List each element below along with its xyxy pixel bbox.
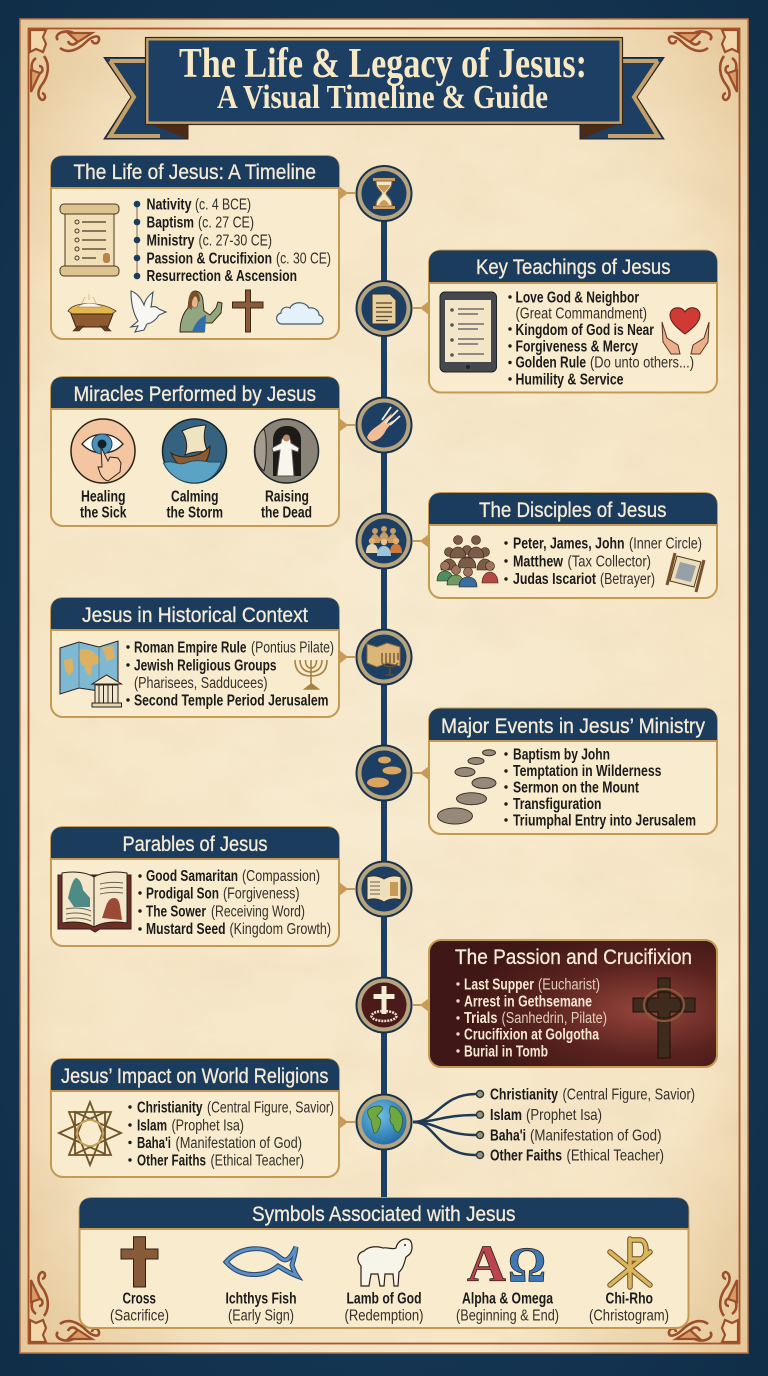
bullets: [504, 541, 508, 581]
icon: dove: [131, 291, 166, 332]
heading: Miracles Performed by Jesus: [74, 382, 316, 406]
icon: healing eye: [71, 419, 135, 483]
bullets: [456, 982, 460, 1053]
heading: The Passion and Crucifixion: [455, 945, 692, 969]
symbol labels: Lamb of God: [346, 1290, 422, 1308]
panel: disciples: [429, 493, 717, 598]
teachings list: Forgiveness & Mercy: [516, 338, 638, 356]
symbol labels: (Redemption): [344, 1308, 424, 1324]
passion list: (Sanhedrin, Pilate): [502, 1010, 607, 1027]
node: hourglass: [356, 165, 412, 222]
passion list: Trials: [464, 1010, 498, 1027]
panel: passion and crucifixion: [429, 940, 717, 1067]
bullets: [504, 752, 508, 822]
icon: storm boat: [162, 419, 226, 483]
disciples list: (Betrayer): [600, 571, 655, 588]
religions list: (Prophet Isa): [172, 1118, 244, 1134]
title line 1: The Life & Legacy of Jesus:: [179, 41, 587, 87]
parables list: (Receiving Word): [211, 904, 305, 920]
icon: heart and hands: [662, 308, 709, 354]
miracle labels: the Dead: [261, 504, 312, 522]
timeline list: Baptism: [146, 214, 194, 232]
icon: manger: [68, 294, 116, 331]
passion list: Arrest in Gethsemane: [464, 994, 592, 1010]
icon: torah scroll: [667, 553, 704, 592]
context list: Second Temple Period Jerusalem: [134, 692, 328, 710]
icon: cross: [121, 1237, 158, 1287]
bullets: [128, 1105, 132, 1162]
title line 2: A Visual Timeline & Guide: [217, 79, 548, 116]
timeline list: Nativity: [146, 196, 192, 214]
panel: world religions: [51, 1059, 339, 1177]
heading: The Life of Jesus: A Timeline: [74, 160, 316, 184]
timeline list: (c. 27-30 CE): [198, 232, 272, 250]
teachings list: Kingdom of God is Near: [516, 322, 654, 339]
miracle labels: Raising: [265, 488, 309, 506]
timeline list: [146, 196, 331, 285]
context list: Jewish Religious Groups: [134, 658, 276, 674]
events list: Temptation in Wilderness: [513, 763, 662, 780]
teachings list: Love God & Neighbor: [516, 290, 639, 306]
icon: lamb: [358, 1239, 412, 1286]
heading: Symbols Associated with Jesus: [252, 1202, 516, 1226]
panel: historical context: [51, 598, 339, 717]
timeline dots: [134, 201, 140, 279]
symbol labels: Chi-Rho: [606, 1290, 653, 1308]
icon: cloud: [277, 303, 323, 324]
events list: [513, 746, 696, 830]
icon: temple: [92, 675, 122, 707]
parables list: (Kingdom Growth): [230, 921, 331, 938]
icon: stepping stones: [438, 750, 496, 824]
timeline list: (c. 30 CE): [276, 250, 331, 268]
miracle labels: [80, 488, 312, 522]
icon: alpha and omega: [467, 1236, 546, 1293]
parables list: [146, 868, 331, 938]
node: map and menorah: [356, 628, 412, 686]
bullets: [508, 295, 512, 381]
religions list: Christianity: [137, 1100, 203, 1116]
heading: Jesus’ Impact on World Religions: [61, 1064, 328, 1088]
events list: Baptism by John: [513, 746, 610, 764]
teachings list: (Great Commandment): [516, 306, 647, 322]
disciples list: Peter, James, John: [513, 536, 624, 552]
icon: alpha and omega: Ω: [508, 1236, 546, 1292]
heading: The Disciples of Jesus: [479, 498, 666, 522]
faiths list: (Central Figure, Savior): [562, 1086, 695, 1104]
panel: symbols: [80, 1198, 688, 1328]
node: disciples group: [356, 512, 412, 570]
parables list: (Forgiveness): [223, 886, 300, 902]
teachings list: (Do unto others...): [590, 354, 694, 372]
timeline list: (c. 4 BCE): [195, 196, 251, 214]
symbol labels: Ichthys Fish: [226, 1290, 296, 1308]
parables list: Prodigal Son: [146, 886, 219, 902]
religions list: (Ethical Teacher): [210, 1152, 304, 1170]
miracle labels: Calming: [171, 488, 218, 506]
context list: [134, 640, 334, 710]
icon: Jesus figure: [180, 291, 222, 332]
miracle labels: the Sick: [80, 504, 127, 522]
passion list: [464, 976, 607, 1060]
corner ornament: top right: [669, 30, 738, 100]
node: open book: [356, 860, 412, 918]
faiths list: Christianity: [490, 1086, 558, 1104]
faiths list: [490, 1086, 695, 1164]
events list: Triumphal Entry into Jerusalem: [513, 813, 696, 830]
context list: (Pharisees, Sadducees): [134, 675, 268, 692]
faiths list: Other Faiths: [490, 1148, 562, 1164]
node: cross and wreath: [356, 976, 412, 1034]
symbol labels: (Beginning & End): [456, 1308, 559, 1324]
icon: illustrated book: [58, 872, 131, 932]
faiths list: Baha'i: [490, 1128, 526, 1144]
teachings list: Golden Rule: [516, 354, 586, 372]
panel: key teachings: [429, 250, 717, 392]
icon: cross with crown of thorns: [633, 978, 695, 1058]
node: healing hand: [356, 396, 412, 454]
heading: Parables of Jesus: [122, 832, 268, 856]
symbol labels: (Christogram): [589, 1308, 669, 1324]
events list: Sermon on the Mount: [513, 780, 639, 797]
symbol labels: (Sacrifice): [110, 1308, 169, 1324]
parables list: The Sower: [146, 904, 206, 920]
node: document: [356, 280, 412, 337]
disciples list: Matthew: [513, 554, 564, 570]
passion list: Crucifixion at Golgotha: [464, 1026, 599, 1044]
icon: menorah: [295, 660, 327, 689]
icon: group of disciples: [437, 536, 498, 587]
timeline spine: [381, 193, 387, 1198]
panel: major events: [429, 708, 717, 834]
icon: nine-pointed star: [59, 1102, 121, 1165]
panel: parables: [51, 827, 339, 946]
events list: Transfiguration: [513, 796, 602, 813]
bullets: [138, 874, 142, 931]
corner ornament: bottom left: [30, 1272, 99, 1342]
icon: chi-rho: [610, 1239, 650, 1287]
timeline list: Ministry: [146, 232, 195, 250]
node: stepping stones: [356, 744, 412, 802]
miracle labels: the Storm: [166, 504, 223, 522]
religions list: Other Faiths: [137, 1152, 206, 1170]
religions list: Islam: [137, 1118, 167, 1134]
icon: scroll: [60, 204, 119, 276]
teachings list: Humility & Service: [516, 372, 624, 388]
symbol labels: (Early Sign): [228, 1308, 294, 1324]
faiths list: (Manifestation of God): [530, 1128, 662, 1144]
symbol labels: Cross: [122, 1290, 156, 1308]
disciples list: [513, 536, 702, 588]
timeline list: (c. 27 CE): [198, 214, 254, 232]
icon: cross: [232, 290, 263, 332]
icon: alpha and omega: A: [467, 1236, 506, 1293]
parables list: Mustard Seed: [146, 921, 226, 938]
religions list: (Manifestation of God): [176, 1135, 302, 1152]
context list: (Pontius Pilate): [251, 640, 334, 656]
corner ornament: top left: [30, 30, 99, 100]
icon: world map: [60, 641, 118, 694]
religions list: (Central Figure, Savior): [207, 1100, 334, 1116]
bullets: [126, 645, 130, 702]
title banner: [104, 38, 664, 139]
icon: ichthys fish: [226, 1247, 297, 1276]
religions list: [137, 1100, 334, 1170]
icon: tablet: [440, 292, 496, 372]
node: globe: [356, 1094, 412, 1150]
passion list: Burial in Tomb: [464, 1044, 548, 1060]
faiths list: (Ethical Teacher): [566, 1148, 664, 1164]
parables list: Good Samaritan: [146, 868, 238, 885]
parables list: (Compassion): [242, 868, 320, 885]
corner ornament: bottom right: [669, 1272, 738, 1342]
religions list: Baha'i: [137, 1135, 171, 1152]
heading: Key Teachings of Jesus: [476, 255, 670, 279]
timeline list: Resurrection & Ascension: [146, 268, 297, 285]
symbol labels: Alpha & Omega: [462, 1290, 553, 1308]
disciples list: (Tax Collector): [568, 554, 651, 570]
panel: life timeline: [51, 156, 339, 339]
passion list: Last Supper: [464, 976, 534, 994]
heading: Major Events in Jesus’ Ministry: [441, 714, 705, 738]
disciples list: (Inner Circle): [629, 536, 702, 552]
disciples list: Judas Iscariot: [513, 571, 596, 588]
branching connector to faiths: [413, 1090, 484, 1158]
context list: Roman Empire Rule: [134, 640, 247, 656]
icon: empty tomb: [254, 419, 318, 483]
teachings list: [516, 290, 694, 388]
faiths list: Islam: [490, 1107, 522, 1124]
symbol labels: [110, 1290, 669, 1324]
timeline list: Passion & Crucifixion: [146, 250, 272, 268]
heading: Jesus in Historical Context: [82, 603, 308, 627]
connector arrows: [339, 186, 429, 1129]
faiths list: (Prophet Isa): [526, 1107, 602, 1124]
passion list: (Eucharist): [538, 976, 600, 994]
panel: miracles: [51, 377, 339, 526]
miracle labels: Healing: [81, 488, 126, 506]
